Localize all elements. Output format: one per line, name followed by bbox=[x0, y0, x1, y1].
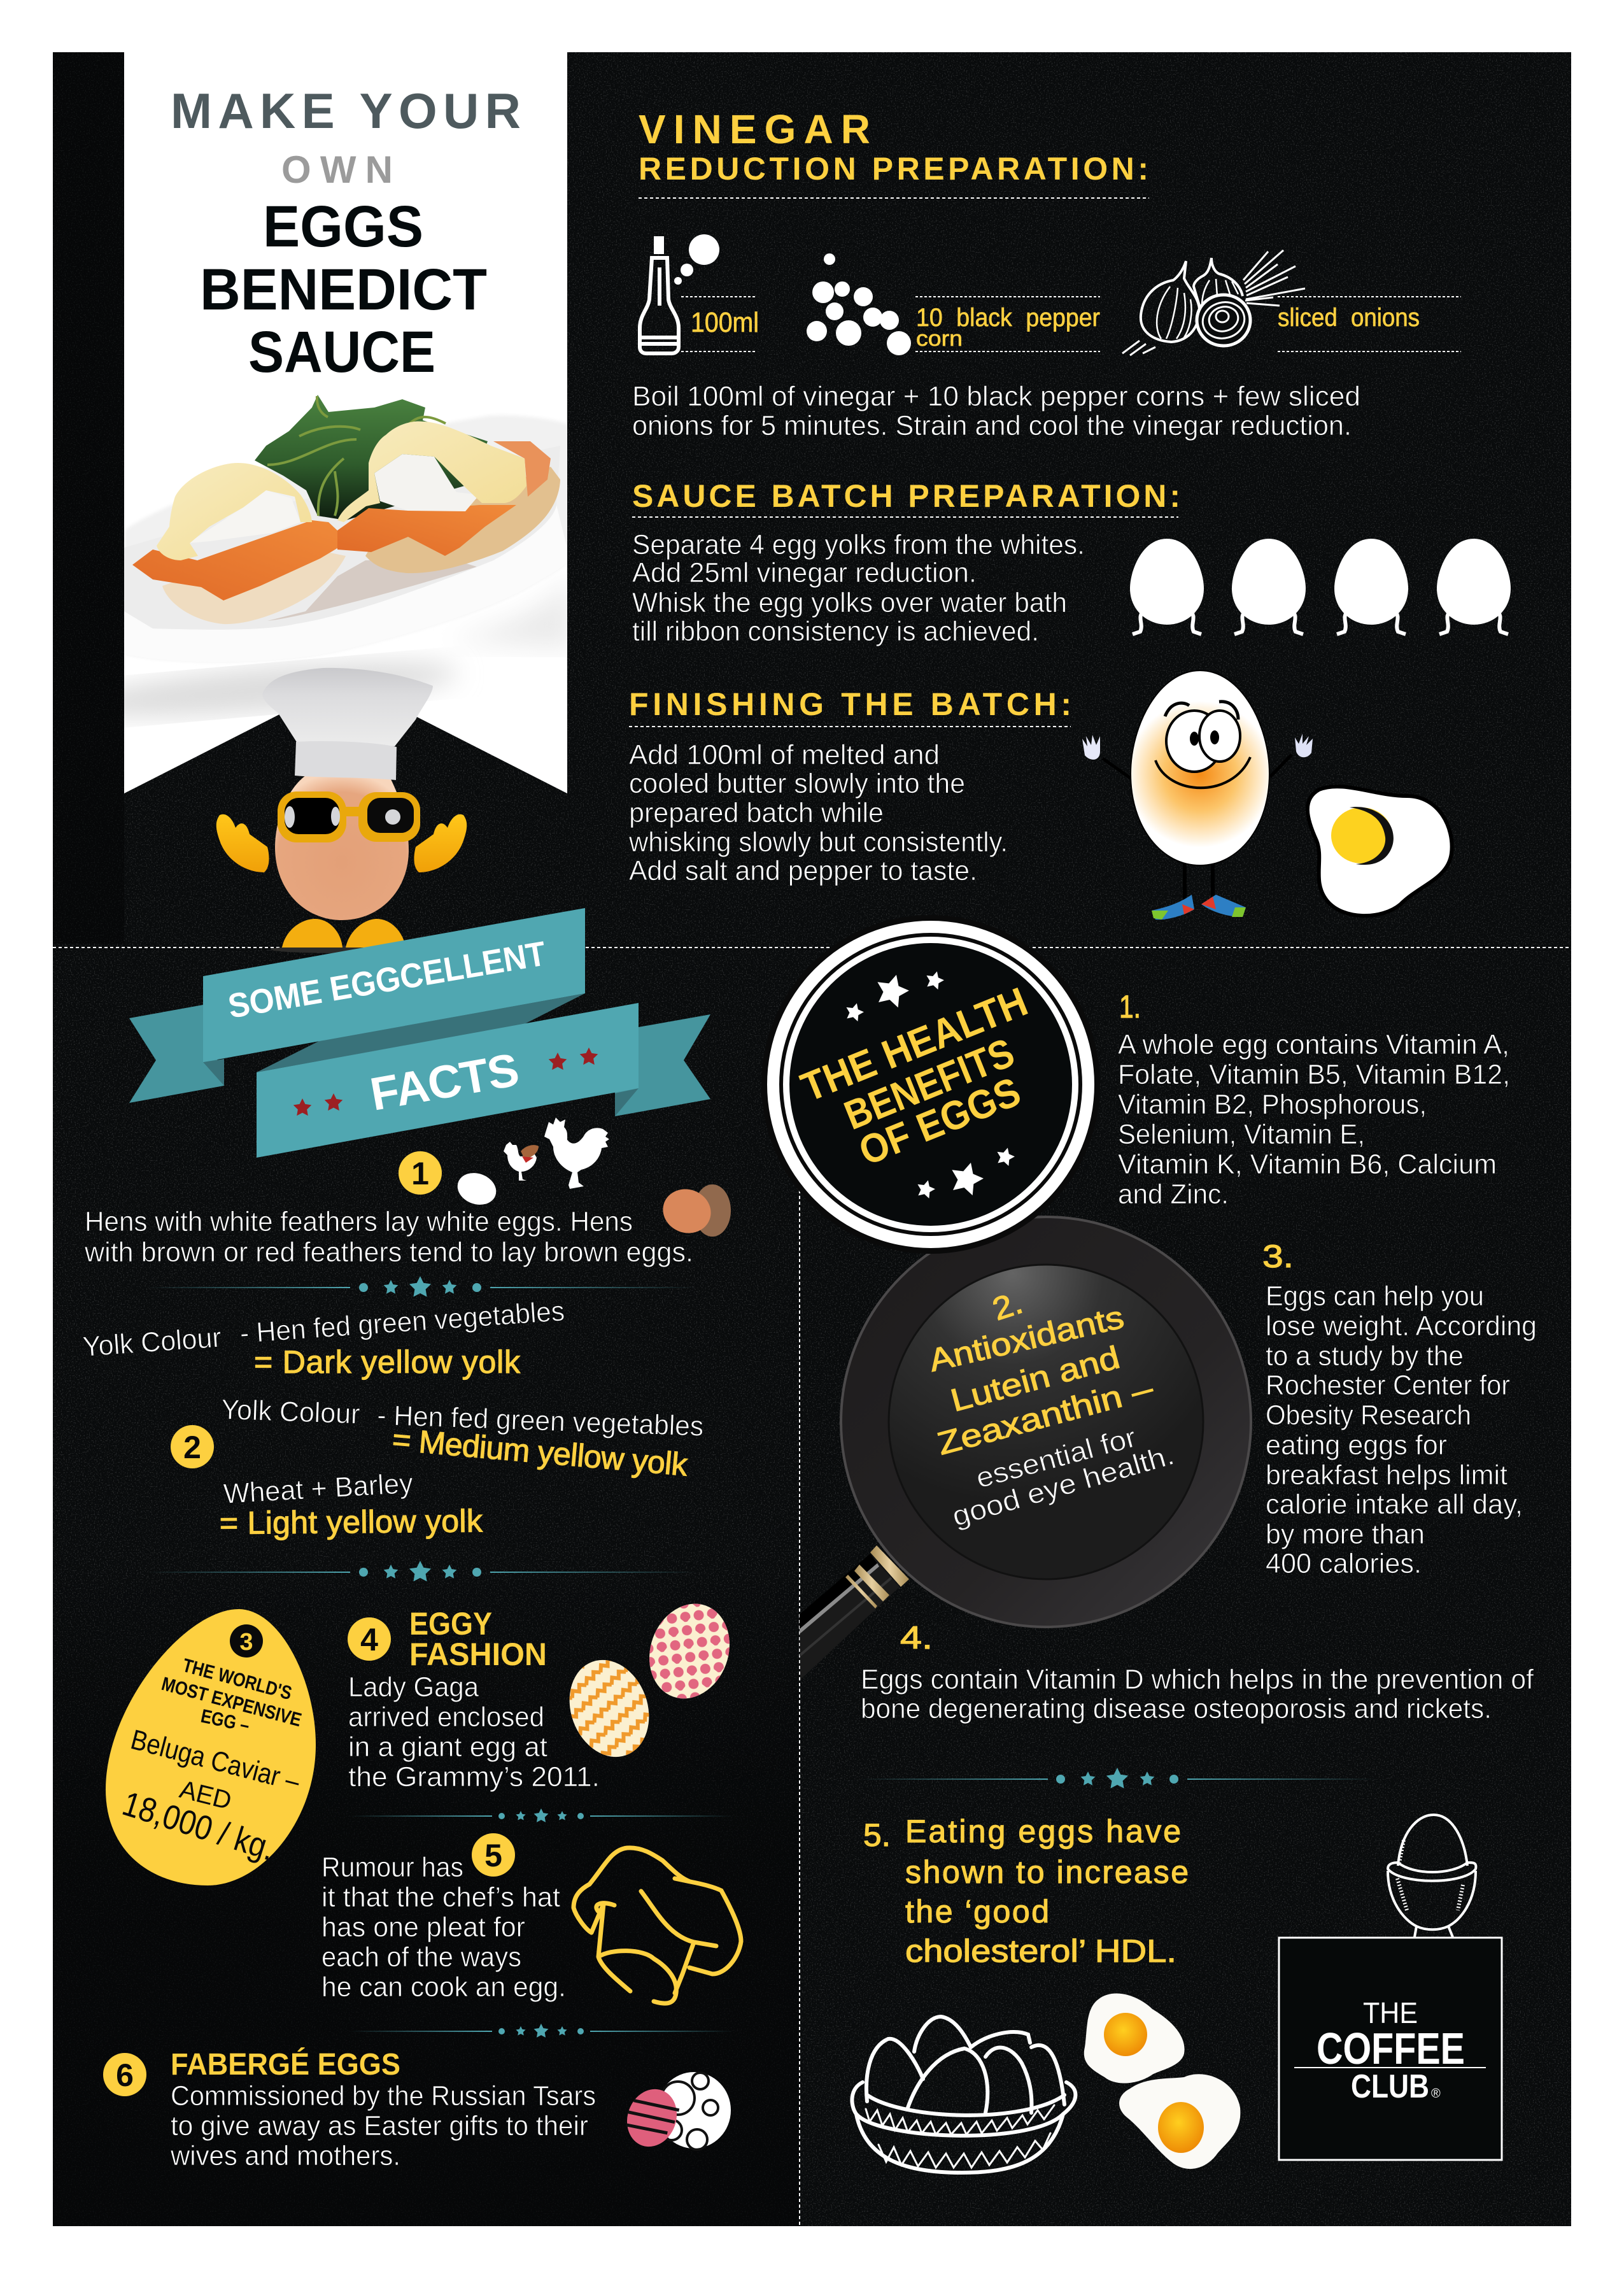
logo: the coffee club: CLUB bbox=[1351, 2068, 1429, 2105]
benefit 1: vitamins: and Zinc. bbox=[1118, 1179, 1229, 1210]
icon: small hen bbox=[504, 1142, 539, 1181]
benefit 3: weight loss: 3. bbox=[1262, 1239, 1294, 1274]
divider bbox=[350, 2024, 733, 2038]
fact 2: yolk colour: - Hen fed green vegetables bbox=[377, 1400, 704, 1442]
benefit 3: weight loss bbox=[1262, 1239, 1537, 1579]
icon: smiling egg character bbox=[1082, 671, 1313, 919]
pan handle bbox=[800, 1545, 909, 1680]
number badge 1 bbox=[399, 1151, 442, 1195]
text: sauce batch steps: Separate 4 egg yolks from the whites. bbox=[632, 529, 1085, 560]
icon: frying pan magnifier bbox=[800, 1217, 1251, 1680]
text: finishing steps bbox=[628, 739, 1008, 886]
fact 1: hens and eggs: Hens with white feathers lay white eggs. Hens bbox=[85, 1206, 633, 1237]
fact 2: yolk colour: = Medium yellow yolk bbox=[391, 1421, 689, 1483]
divider bbox=[350, 1808, 733, 1822]
title: eggs benedict sauce: BENEDICT bbox=[200, 257, 487, 322]
icon: peppercorns bbox=[807, 253, 911, 355]
fact 6: faberge eggs: to give away as Easter gifts to their bbox=[171, 2110, 588, 2141]
text: boil instructions: onions for 5 minutes. Strain and cool the vinegar reduction. bbox=[632, 410, 1352, 441]
benefit 3: weight loss: Obesity Research bbox=[1266, 1400, 1471, 1431]
icon: brown eggs bbox=[657, 1182, 731, 1240]
fact 2: yolk colour: Yolk Colour bbox=[81, 1322, 222, 1363]
benefit 3: weight loss: Eggs can help you bbox=[1266, 1281, 1484, 1312]
text: sauce batch steps: Whisk the egg yolks over water bath bbox=[632, 587, 1067, 618]
fact 1: hens and eggs bbox=[84, 1118, 731, 1268]
text: boil instructions bbox=[632, 381, 1360, 441]
heading: finishing the batch: FINISHING THE BATCH: bbox=[629, 686, 1071, 722]
benefit 4: vitamin d: bone degenerating disease osteoporosis and rickets. bbox=[861, 1693, 1492, 1724]
text: finishing steps: Add salt and pepper to taste. bbox=[629, 855, 977, 886]
character shoes bbox=[1152, 895, 1246, 919]
number badge 1: 1 bbox=[411, 1156, 429, 1191]
title: eggs benedict sauce: EGGS bbox=[263, 194, 423, 259]
benefit 1: vitamins: Vitamin K, Vitamin B6, Calcium bbox=[1118, 1149, 1497, 1180]
fact 4: eggy fashion: EGGY bbox=[409, 1606, 492, 1642]
fact 3: yellow egg most expensive: THE WORLD'S bbox=[180, 1655, 294, 1704]
icon: frying pan magnifier: 2. bbox=[988, 1284, 1027, 1327]
salmon bbox=[132, 441, 551, 600]
number badge 3 bbox=[230, 1624, 263, 1658]
logo: the coffee club: THE bbox=[1363, 1996, 1418, 2029]
mascot feet bbox=[271, 919, 417, 953]
icon: onions bbox=[1122, 250, 1305, 355]
fact 3: yellow egg most expensive: 18,000 / kg. bbox=[118, 1784, 279, 1868]
fact 2: yolk colour: = Dark yellow yolk bbox=[254, 1344, 521, 1380]
logo: the coffee club: COFFEE bbox=[1317, 2024, 1465, 2073]
panel: some eggcellent facts ribbon: FACTS bbox=[367, 1044, 523, 1121]
fact 4: eggy fashion: Lady Gaga bbox=[348, 1672, 479, 1703]
benefit 3: weight loss: eating eggs for bbox=[1266, 1430, 1447, 1461]
icon: frying pan magnifier: essential for bbox=[973, 1422, 1140, 1494]
icon: polka dot egg bbox=[637, 1593, 742, 1710]
fact 3: yellow egg most expensive: MOST EXPENSIVE bbox=[159, 1673, 304, 1731]
icon: basket of eggs bbox=[852, 2017, 1075, 2173]
text: finishing steps: whisking slowly but consistently. bbox=[628, 827, 1008, 858]
benefit 5: good cholesterol: 5. bbox=[863, 1817, 891, 1853]
fact 3: yellow egg most expensive bbox=[106, 1609, 316, 1885]
number badge 6: 6 bbox=[116, 2057, 134, 2093]
fact 5: chef's hat pleats: Rumour has bbox=[321, 1852, 463, 1883]
fact 4: eggy fashion: FASHION bbox=[409, 1636, 547, 1672]
fact 5: chef's hat pleats: has one pleat for bbox=[321, 1912, 525, 1943]
left poached egg bbox=[157, 463, 312, 560]
heading: vinegar reduction preparation: VINEGAR bbox=[639, 106, 870, 152]
number badge 2: 2 bbox=[183, 1430, 201, 1465]
divider bbox=[147, 1561, 696, 1582]
fact 1: hens and eggs: with brown or red feathers tend to lay brown eggs. bbox=[84, 1237, 693, 1268]
panel: some eggcellent facts ribbon bbox=[129, 908, 710, 1158]
number badge 6 bbox=[103, 2053, 146, 2096]
benefit 3: weight loss: Rochester Center for bbox=[1266, 1370, 1510, 1401]
badge: the health benefits of eggs: OF EGGS bbox=[852, 1069, 1027, 1174]
ingredient: black pepper corn: corn bbox=[916, 327, 963, 351]
text: sauce batch steps: Add 25ml vinegar reduction. bbox=[632, 557, 977, 588]
benefit 3: weight loss: by more than bbox=[1266, 1519, 1425, 1550]
title: eggs benedict sauce bbox=[200, 194, 487, 385]
benefit 5: good cholesterol: cholesterol’ HDL. bbox=[905, 1933, 1176, 1969]
chef hat bbox=[262, 668, 433, 780]
panel: some eggcellent facts ribbon: SOME EGGCELLENT bbox=[225, 934, 549, 1026]
icon: frying pan magnifier: Lutein and bbox=[947, 1339, 1124, 1419]
icon: frying pan magnifier: good eye health. bbox=[949, 1439, 1178, 1533]
ingredient: vinegar bottle 100ml bbox=[640, 234, 759, 353]
title: make your own: MAKE YOUR bbox=[171, 83, 521, 139]
title: make your own: OWN bbox=[281, 148, 393, 191]
benefit 4: vitamin d: 4. bbox=[900, 1620, 933, 1656]
number badge 2 bbox=[171, 1425, 214, 1468]
icon: fried egg bbox=[1308, 786, 1452, 916]
heading: vinegar reduction preparation: REDUCTION PREPARATION: bbox=[639, 151, 1148, 187]
fact 2: yolk colour: Wheat + Barley bbox=[223, 1468, 414, 1510]
fact 6: faberge eggs: FABERGÉ EGGS bbox=[171, 2047, 400, 2082]
divider bbox=[861, 1768, 1376, 1789]
badge: the health benefits of eggs bbox=[761, 915, 1100, 1254]
icon: frying pan magnifier: Zeaxanthin – bbox=[933, 1370, 1157, 1462]
logo: the coffee club: ® bbox=[1431, 2087, 1441, 2101]
fact 3: yellow egg most expensive: EGG – bbox=[199, 1706, 251, 1736]
white stars bbox=[844, 969, 1017, 1199]
divider bbox=[147, 1276, 696, 1297]
sunglasses bbox=[278, 792, 420, 842]
fact 5: chef's hat pleats: each of the ways bbox=[321, 1942, 521, 1973]
benefit 5: good cholesterol bbox=[863, 1814, 1189, 1969]
benefit 1: vitamins: Folate, Vitamin B5, Vitamin B12, bbox=[1118, 1059, 1510, 1090]
right poached egg bbox=[337, 422, 526, 522]
text: sauce batch steps bbox=[632, 529, 1085, 647]
icon: four white eggs with legs bbox=[1130, 539, 1511, 634]
fact 2: yolk colour: Yolk Colour bbox=[221, 1394, 360, 1430]
benefit 1: vitamins: Vitamin B2, Phosphorous, bbox=[1118, 1089, 1427, 1120]
logo: the coffee club bbox=[1279, 1938, 1502, 2160]
fact 6: faberge eggs: Commissioned by the Russian Tsars bbox=[171, 2080, 596, 2112]
fact 5: chef's hat pleats bbox=[321, 1833, 741, 2003]
benefit 1: vitamins bbox=[1118, 989, 1510, 1210]
fact 4: eggy fashion: in a giant egg at bbox=[348, 1731, 547, 1763]
badge: the health benefits of eggs: BENEFITS bbox=[838, 1029, 1020, 1139]
icon: egg chef mascot bbox=[216, 668, 467, 953]
icon: faberge eggs bbox=[619, 2072, 731, 2154]
icon: frying pan magnifier: Antioxidants bbox=[926, 1299, 1127, 1379]
photo: eggs benedict plate bbox=[75, 395, 573, 727]
benefit 5: good cholesterol: the ‘good bbox=[905, 1894, 1049, 1929]
benefit 3: weight loss: calorie intake all day, bbox=[1266, 1489, 1523, 1520]
fact 2: yolk colour bbox=[81, 1295, 704, 1541]
fact 2: yolk colour: - Hen fed green vegetables bbox=[239, 1295, 565, 1349]
fact 3: yellow egg most expensive: Beluga Caviar – bbox=[127, 1724, 304, 1798]
fact 3: yellow egg most expensive: AED bbox=[177, 1775, 234, 1815]
icon: egg cup bbox=[1388, 1815, 1476, 1937]
text: boil instructions: Boil 100ml of vinegar + 10 black pepper corns + few sliced bbox=[632, 381, 1360, 412]
fact 2: yolk colour: = Light yellow yolk bbox=[220, 1503, 483, 1541]
benefit 1: vitamins: 1. bbox=[1119, 989, 1141, 1025]
ingredient: black pepper corn: 10 black pepper bbox=[916, 304, 1100, 332]
benefit 4: vitamin d bbox=[861, 1620, 1534, 1724]
text: finishing steps: prepared batch while bbox=[629, 797, 884, 828]
number badge 4: 4 bbox=[360, 1622, 378, 1658]
fact 4: eggy fashion: arrived enclosed bbox=[348, 1701, 544, 1733]
salad greens bbox=[255, 395, 488, 520]
benefit 1: vitamins: Selenium, Vitamin E, bbox=[1118, 1119, 1365, 1150]
benefit 1: vitamins: A whole egg contains Vitamin A, bbox=[1118, 1029, 1509, 1060]
fact 6: faberge eggs: wives and mothers. bbox=[170, 2140, 400, 2171]
number badge 3: 3 bbox=[239, 1629, 253, 1656]
benefit 4: vitamin d: Eggs contain Vitamin D which helps in the prevention of bbox=[861, 1664, 1534, 1695]
benefit 3: weight loss: breakfast helps limit bbox=[1266, 1459, 1507, 1491]
icon: white egg bbox=[453, 1168, 500, 1210]
mascot hands bbox=[216, 814, 467, 872]
number badge 4 bbox=[348, 1617, 391, 1661]
number badge 5 bbox=[472, 1833, 515, 1877]
text: finishing steps: Add 100ml of melted and bbox=[629, 739, 940, 770]
benefit 3: weight loss: lose weight. According bbox=[1266, 1310, 1537, 1342]
icon: chef hat outline bbox=[574, 1848, 741, 2003]
number badge 5: 5 bbox=[484, 1838, 502, 1873]
badge: the health benefits of eggs: THE HEALTH bbox=[794, 978, 1034, 1111]
benefit 5: good cholesterol: Eating eggs have bbox=[905, 1814, 1181, 1849]
ingredient: black pepper corn bbox=[807, 253, 1100, 355]
ingredient: sliced onions: sliced onions bbox=[1278, 304, 1420, 332]
icon: zigzag egg bbox=[556, 1649, 662, 1768]
benefit 5: good cholesterol: shown to increase bbox=[905, 1854, 1189, 1890]
text: finishing steps: cooled butter slowly into the bbox=[629, 768, 965, 799]
ingredient: sliced onions bbox=[1122, 250, 1461, 355]
title: eggs benedict sauce: SAUCE bbox=[248, 320, 435, 385]
benefit 3: weight loss: 400 calories. bbox=[1266, 1548, 1422, 1579]
fact 5: chef's hat pleats: it that the chef’s hat bbox=[321, 1882, 560, 1913]
fact 4: eggy fashion bbox=[348, 1593, 742, 1793]
icon: vinegar bottle bbox=[640, 234, 719, 353]
red stars bbox=[293, 1047, 598, 1116]
panel: title banner bbox=[124, 52, 567, 793]
heading: sauce batch preparation: SAUCE BATCH PREPARATION: bbox=[632, 478, 1180, 514]
ingredient: vinegar bottle 100ml: 100ml bbox=[691, 307, 759, 338]
fact 5: chef's hat pleats: he can cook an egg. bbox=[321, 1971, 566, 2003]
icon: two fried eggs bbox=[1084, 1994, 1240, 2169]
title: make your own bbox=[171, 83, 521, 191]
fact 6: faberge eggs bbox=[103, 2047, 731, 2171]
text: sauce batch steps: till ribbon consistency is achieved. bbox=[632, 616, 1039, 647]
fact 4: eggy fashion: the Grammy’s 2011. bbox=[348, 1761, 600, 1793]
benefit 3: weight loss: to a study by the bbox=[1266, 1340, 1464, 1372]
heading: vinegar reduction preparation bbox=[639, 106, 1149, 198]
icon: rooster bbox=[544, 1118, 609, 1189]
